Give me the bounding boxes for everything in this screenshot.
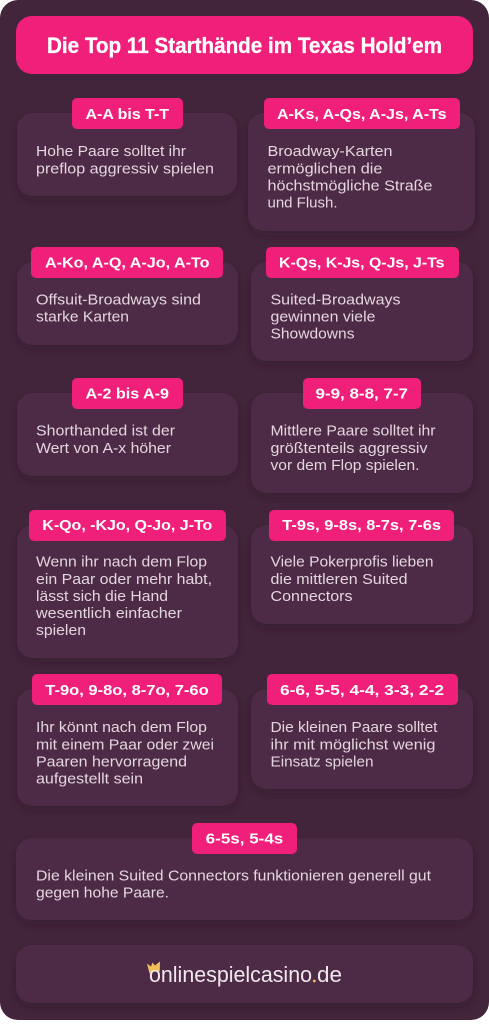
- panel: A-Ks, A-Qs, A-Js, A-Ts: und Flush.: [268, 194, 338, 212]
- panel: K-Qo, -KJo, Q-Jo, J-To: Wenn ihr nach dem Flop: [36, 554, 207, 571]
- panel: 6-6, 5-5, 4-4, 3-3, 2-2: Einsatz spielen: [270, 754, 374, 770]
- panel: 6-6, 5-5, 4-4, 3-3, 2-2: ihr mit möglichst wenig: [270, 736, 436, 753]
- title banner: [16, 16, 473, 74]
- panel: 6-6, 5-5, 4-4, 3-3, 2-2: [251, 674, 473, 789]
- panel: T-9s, 9-8s, 8-7s, 7-6s: Viele Pokerprofis lieben: [270, 554, 434, 571]
- panel: A-A bis T-T: Hohe Paare solltet ihr: [36, 143, 186, 160]
- panel: A-A bis T-T: preflop aggressiv spielen: [36, 160, 214, 177]
- footer panel: logo: [16, 945, 473, 1003]
- panel: A-2 bis A-9: Wert von A-x höher: [36, 440, 171, 457]
- panel: 9-9, 8-8, 7-7: Mittlere Paare solltet ihr: [270, 423, 436, 440]
- panel: K-Qo, -KJo, Q-Jo, J-To: spielen: [36, 622, 86, 639]
- panel: K-Qo, -KJo, Q-Jo, J-To: K-Qo, -KJo, Q-Jo, J-To: [42, 518, 212, 534]
- panel: A-2 bis A-9: [17, 378, 238, 476]
- panel: T-9o, 9-8o, 8-7o, 7-6o: mit einem Paar oder zwei: [36, 736, 214, 753]
- panel: A-Ks, A-Qs, A-Js, A-Ts: ermöglichen die: [268, 160, 382, 177]
- panel: T-9o, 9-8o, 8-7o, 7-6o: Paaren hervorragend: [36, 754, 187, 770]
- panel: 6-6, 5-5, 4-4, 3-3, 2-2: 6-6, 5-5, 4-4, 3-3, 2-2: [280, 683, 444, 699]
- panel: T-9o, 9-8o, 8-7o, 7-6o: [17, 674, 238, 806]
- panel: T-9o, 9-8o, 8-7o, 7-6o: T-9o, 9-8o, 8-7o, 7-6o: [45, 683, 209, 699]
- panel: K-Qo, -KJo, Q-Jo, J-To: [17, 510, 238, 658]
- logo wordmark: de: [317, 962, 342, 987]
- panel: K-Qo, -KJo, Q-Jo, J-To: wesentlich einfacher: [35, 605, 182, 622]
- panel: A-Ko, A-Q, A-Jo, A-To: A-Ko, A-Q, A-Jo, A-To: [45, 256, 210, 272]
- panel: 9-9, 8-8, 7-7: vor dem Flop spielen.: [270, 457, 420, 474]
- panel: K-Qo, -KJo, Q-Jo, J-To: ein Paar oder mehr habt,: [36, 571, 212, 588]
- panel: 6-5s, 5-4s: Die kleinen Suited Connectors funktionieren generell gut: [36, 868, 432, 885]
- panel: T-9o, 9-8o, 8-7o, 7-6o: aufgestellt sein: [36, 771, 143, 788]
- panel: A-Ko, A-Q, A-Jo, A-To: [17, 247, 238, 345]
- panel: A-A bis T-T: A-A bis T-T: [86, 107, 169, 123]
- panel: T-9s, 9-8s, 8-7s, 7-6s: die mittleren Suited: [270, 571, 408, 588]
- panel: T-9o, 9-8o, 8-7o, 7-6o: Ihr könnt nach dem Flop: [36, 719, 207, 736]
- panel: A-A bis T-T: [17, 98, 237, 196]
- icon: crown: [147, 962, 160, 974]
- panel: 9-9, 8-8, 7-7: 9-9, 8-8, 7-7: [316, 386, 408, 402]
- panel: A-Ks, A-Qs, A-Js, A-Ts: Broadway-Karten: [268, 143, 392, 160]
- panel: T-9s, 9-8s, 8-7s, 7-6s: T-9s, 9-8s, 8-7s, 7-6s: [282, 518, 441, 534]
- panel: T-9s, 9-8s, 8-7s, 7-6s: [251, 510, 473, 624]
- panel: K-Qo, -KJo, Q-Jo, J-To: lässt sich die Hand: [36, 588, 168, 605]
- panel: A-Ks, A-Qs, A-Js, A-Ts: höchstmögliche Straße: [268, 178, 432, 194]
- panel: A-2 bis A-9: A-2 bis A-9: [86, 386, 169, 402]
- panel: A-Ks, A-Qs, A-Js, A-Ts: [248, 98, 475, 231]
- panel: K-Qs, K-Js, Q-Js, J-Ts: [251, 247, 473, 361]
- title banner: Die Top 11 Starthände im Texas Hold’em: [47, 33, 442, 58]
- panel: A-Ko, A-Q, A-Jo, A-To: starke Karten: [36, 308, 129, 326]
- panel: K-Qs, K-Js, Q-Js, J-Ts: K-Qs, K-Js, Q-Js, J-Ts: [279, 256, 444, 272]
- panel: A-Ko, A-Q, A-Jo, A-To: Offsuit-Broadways sind: [36, 291, 201, 308]
- panel: K-Qs, K-Js, Q-Js, J-Ts: Suited-Broadways: [270, 291, 400, 308]
- panel: 6-5s, 5-4s: [16, 823, 473, 920]
- panel: K-Qs, K-Js, Q-Js, J-Ts: gewinnen viele: [270, 308, 376, 326]
- logo wordmark: onlinespielcasino: [149, 962, 312, 987]
- panel: 9-9, 8-8, 7-7: größtenteils aggressiv: [270, 440, 428, 457]
- panel: T-9s, 9-8s, 8-7s, 7-6s: Connectors: [270, 588, 352, 605]
- panel: 6-6, 5-5, 4-4, 3-3, 2-2: Die kleinen Paare solltet: [270, 719, 438, 736]
- panel: A-Ks, A-Qs, A-Js, A-Ts: A-Ks, A-Qs, A-Js, A-Ts: [277, 107, 446, 123]
- panel: 6-5s, 5-4s: 6-5s, 5-4s: [206, 832, 283, 848]
- panel: 9-9, 8-8, 7-7: [251, 378, 473, 493]
- panel: A-2 bis A-9: Shorthanded ist der: [36, 423, 175, 440]
- panel: 6-5s, 5-4s: gegen hohe Paare.: [36, 885, 169, 902]
- panel: K-Qs, K-Js, Q-Js, J-Ts: Showdowns: [270, 326, 354, 343]
